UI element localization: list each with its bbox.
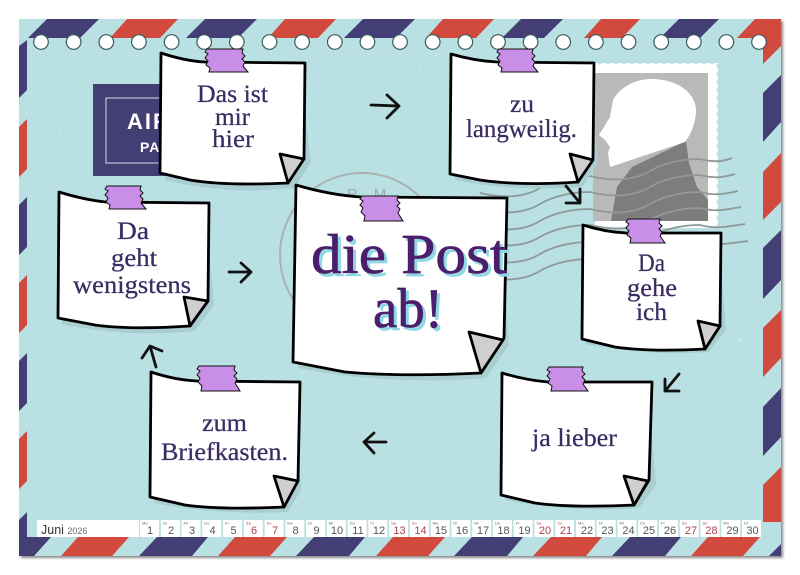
arrow: note 1 to note 2 (371, 95, 399, 118)
month label: Juni 2026 (41, 523, 87, 537)
postmark: RM (347, 186, 402, 203)
weekday labels: Fr (370, 520, 375, 526)
arrow: note 6 to note 7 (364, 433, 386, 453)
weekday labels: Fr (661, 520, 665, 526)
paper speckles (59, 69, 751, 481)
day numbers: 25 (643, 525, 655, 537)
note: ja lieber (501, 367, 656, 509)
arrow: note 2 to note 5 (566, 186, 580, 203)
weekday labels: Mi (329, 520, 333, 526)
weekday labels: Mo (578, 520, 584, 526)
day numbers: 6 (251, 525, 257, 537)
note: Da geht wenigstens: geht (111, 245, 157, 272)
day numbers: 17 (477, 525, 489, 537)
weekday labels: Mo (287, 520, 294, 526)
day numbers: 8 (292, 525, 299, 537)
weekday labels: Do (350, 520, 355, 526)
weekday labels: Mi (184, 520, 188, 526)
weekday labels: Di (599, 520, 603, 526)
weekday labels: So (412, 520, 418, 526)
arrow: note 7 to note 4 (142, 346, 162, 367)
day numbers: 18 (497, 525, 510, 537)
weekday labels: Mo (142, 520, 148, 526)
day numbers: 30 (746, 525, 759, 537)
day numbers: 15 (435, 525, 447, 537)
note: Da gehe ich (582, 219, 726, 353)
day numbers: 24 (622, 525, 635, 537)
day numbers: 5 (230, 525, 237, 537)
arrow: note 5 to note 6 (665, 374, 679, 391)
day numbers: 28 (705, 525, 718, 537)
day numbers: 4 (209, 525, 216, 537)
day numbers: 23 (601, 525, 614, 537)
weekday labels: So (702, 520, 708, 526)
weekday labels: Mo (433, 520, 439, 526)
day numbers: 12 (373, 525, 385, 537)
airmail label (93, 84, 183, 176)
note: Das ist mir hier: hier (212, 126, 255, 153)
note: zu langweilig: langweilig. (466, 116, 577, 143)
note: ja lieber: ja lieber (531, 425, 618, 452)
day numbers: 27 (685, 525, 697, 537)
calendar strip (37, 520, 761, 537)
note: die Post ab (293, 185, 510, 380)
weekday labels: Di (744, 520, 748, 526)
weekday labels: Do (640, 520, 646, 526)
note: Das ist mir hier (160, 49, 311, 190)
weekday labels: Fr (225, 520, 229, 526)
day numbers: 22 (581, 525, 593, 537)
weekday labels: Do (495, 520, 501, 526)
note: Das ist mir hier: Das ist (197, 81, 268, 108)
postmark (280, 158, 748, 337)
note: zum Briefkasten: Briefkasten. (161, 439, 288, 466)
note: Da gehe ich: gehe (627, 275, 677, 302)
weekday labels: Di (308, 520, 312, 526)
weekday labels: So (267, 520, 272, 526)
note: Das ist mir hier: mir (215, 104, 251, 131)
note: zum Briefkasten: zum (202, 410, 248, 437)
note: die Post ab: die Post (311, 224, 507, 286)
note: die Post ab: ab! (376, 281, 446, 343)
note: zu langweilig (450, 49, 598, 188)
airmail label: AIR (127, 109, 171, 134)
weekday labels: Di (163, 520, 167, 526)
weekday labels: Sa (246, 520, 251, 526)
note: zu langweilig: zu (510, 91, 534, 118)
note: Da gehe ich: Da (638, 250, 665, 277)
day numbers: 13 (393, 525, 406, 537)
day numbers: 11 (352, 525, 364, 537)
note: Da geht wenigstens: wenigstens (73, 272, 191, 299)
day numbers: 20 (539, 525, 551, 537)
weekday labels (142, 520, 748, 526)
airmail label: PA (140, 139, 160, 155)
weekday labels: Sa (391, 520, 397, 526)
day numbers: 1 (147, 525, 153, 537)
day numbers (147, 525, 759, 537)
note: Da geht wenigstens (58, 186, 214, 333)
weekday labels: Mi (620, 520, 624, 526)
day numbers: 9 (313, 525, 320, 537)
postage stamp (593, 62, 718, 228)
day cells (140, 520, 761, 537)
day numbers: 19 (518, 525, 531, 537)
day numbers: 29 (726, 525, 739, 537)
weekday labels: Di (453, 520, 457, 526)
weekday labels: Sa (536, 520, 542, 526)
note: die Post ab: ab! (373, 278, 443, 340)
arrow: note 4 to centre (229, 263, 251, 282)
day numbers: 3 (189, 525, 195, 537)
note: Da gehe ich: ich (636, 299, 668, 326)
note: die Post ab: die Post (314, 227, 510, 289)
weekday labels: Fr (516, 520, 520, 526)
day numbers: 14 (414, 525, 427, 537)
day numbers: 21 (560, 525, 572, 537)
punched holes (34, 35, 766, 49)
note: Da geht wenigstens: Da (117, 218, 149, 245)
day numbers: 10 (331, 525, 343, 537)
day numbers: 7 (272, 525, 278, 537)
weekday labels: Do (204, 520, 210, 526)
weekday labels: Sa (682, 520, 687, 526)
weekday labels: Mi (474, 520, 479, 526)
weekday labels: Mo (723, 520, 730, 526)
note: zum Briefkasten (150, 366, 301, 513)
day numbers: 16 (456, 525, 468, 537)
weekday labels: So (557, 520, 563, 526)
month label (37, 520, 139, 537)
day numbers: 2 (168, 525, 174, 537)
day numbers: 26 (664, 525, 676, 537)
